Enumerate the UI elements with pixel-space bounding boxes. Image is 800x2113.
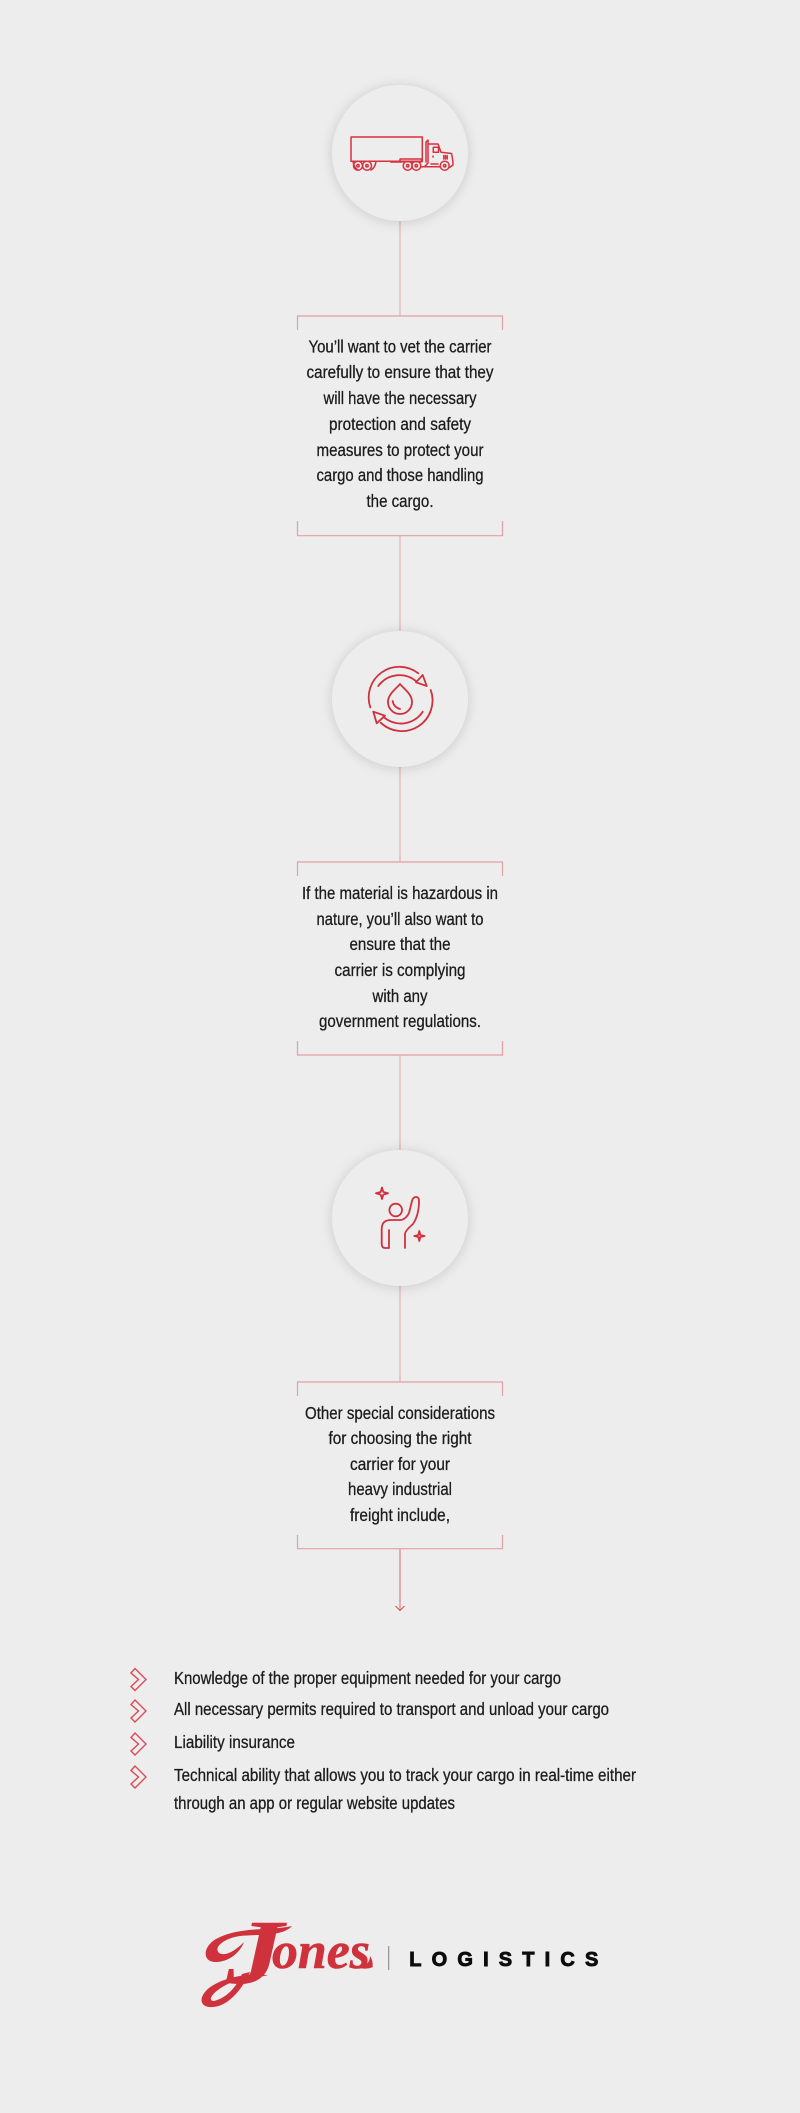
panel: text box hazardous material bbox=[298, 862, 502, 1055]
list: carrier considerations bbox=[131, 1668, 636, 1813]
text: vet the carrier: cargo and those handling bbox=[316, 465, 484, 485]
text: special considerations: carrier for your bbox=[350, 1454, 450, 1474]
arrow: down to list bbox=[396, 1549, 404, 1610]
logo script wordmark: ones bbox=[272, 1923, 370, 1980]
icon: chevron 1 bbox=[131, 1668, 146, 1690]
panel: text box special considerations bbox=[298, 1382, 502, 1549]
text: special considerations: freight include, bbox=[350, 1505, 450, 1525]
text: special considerations: for choosing the right bbox=[328, 1428, 472, 1448]
text: vet the carrier: will have the necessary bbox=[323, 388, 477, 408]
icon: chevron 3 bbox=[131, 1733, 146, 1755]
text: hazardous material: ensure that the bbox=[350, 934, 450, 954]
text: hazardous material: nature, you’ll also want to bbox=[316, 909, 484, 929]
list item 2: All necessary permits required to transport and unload your cargo bbox=[174, 1699, 609, 1719]
logo script wordmark bbox=[202, 1901, 373, 2007]
list item 4: Technical ability that allows you to track your cargo in real-time either bbox=[174, 1765, 636, 1785]
icon: truck in circle bbox=[332, 85, 468, 221]
list item 1: Knowledge of the proper equipment needed for your cargo bbox=[174, 1668, 561, 1688]
text: vet the carrier: measures to protect your bbox=[316, 440, 484, 460]
text: vet the carrier: protection and safety bbox=[329, 414, 471, 434]
icon: chevron 2 bbox=[131, 1700, 146, 1722]
text: hazardous material: carrier is complying bbox=[334, 960, 466, 980]
wordmark: LOGISTICS: LOGISTICS bbox=[409, 1949, 598, 1971]
icon: recycling oil drop in circle bbox=[332, 631, 468, 767]
text: vet the carrier bbox=[306, 336, 494, 511]
text: vet the carrier: the cargo. bbox=[366, 491, 434, 511]
list item 3: Liability insurance bbox=[174, 1732, 295, 1752]
text: hazardous material: with any bbox=[372, 986, 428, 1006]
logo script wordmark: J bbox=[225, 1901, 288, 2003]
text: special considerations bbox=[305, 1403, 495, 1525]
text: special considerations: Other special considerations bbox=[305, 1403, 495, 1423]
list item 4: through an app or regular website updates bbox=[174, 1793, 455, 1813]
list item 4 bbox=[174, 1765, 636, 1813]
text: hazardous material: If the material is hazardous in bbox=[302, 883, 498, 903]
text: hazardous material bbox=[302, 883, 498, 1031]
icon: chevron 4 bbox=[131, 1766, 146, 1788]
divider bbox=[388, 1946, 389, 1970]
text: vet the carrier: You’ll want to vet the carrier bbox=[308, 336, 492, 356]
logo: Jones Logistics bbox=[202, 1901, 598, 2007]
panel: text box carrier vetting bbox=[298, 316, 502, 536]
icon: person with raised arm in circle bbox=[332, 1150, 468, 1286]
text: special considerations: heavy industrial bbox=[348, 1479, 452, 1499]
text: vet the carrier: carefully to ensure that they bbox=[306, 362, 494, 382]
text: hazardous material: government regulations. bbox=[319, 1011, 481, 1031]
